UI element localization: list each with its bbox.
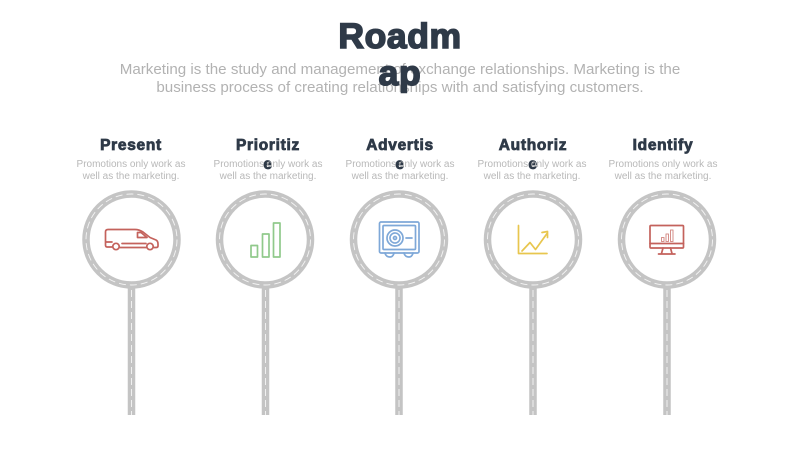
heading: prioritize: e	[263, 156, 273, 173]
text: present description: Promotions only work as	[77, 159, 185, 170]
heading: advertise: e	[395, 156, 405, 173]
heading: prioritize: Prioritiz	[236, 137, 300, 154]
panel: authorize	[478, 137, 586, 415]
heading: authorize: Authoriz	[499, 137, 567, 154]
text: advertise description: well as the marketing.	[351, 171, 448, 182]
text: advertise description: Promotions only work as	[346, 159, 454, 170]
text: identify description	[609, 159, 717, 182]
text: authorize description: Promotions only work as	[478, 159, 586, 170]
title: ap	[379, 53, 421, 93]
icon: bar signal	[251, 223, 280, 257]
subtitle: business process of creating relationships with and satisfying customers.	[156, 79, 644, 96]
text: present description	[77, 159, 185, 182]
text: prioritize description: well as the marketing.	[219, 171, 316, 182]
text: identify description: well as the marketing.	[614, 171, 711, 182]
road pin: authorize	[488, 194, 578, 415]
text: advertise description	[346, 159, 454, 182]
text: authorize description: well as the marketing.	[483, 171, 580, 182]
icon: monitor	[650, 226, 684, 254]
heading: prioritize	[236, 137, 300, 173]
icon: line chart	[518, 226, 548, 254]
panel: prioritize	[214, 137, 322, 415]
road pin: identify	[622, 194, 712, 415]
text: identify description: Promotions only work as	[609, 159, 717, 170]
subtitle: Marketing is the study and management of exchange relationships. Marketing is the	[120, 61, 680, 78]
panel: present	[77, 137, 185, 415]
heading: identify: Identify	[633, 137, 693, 154]
title	[338, 16, 462, 93]
title: Roadm	[338, 16, 462, 56]
heading: advertise	[366, 137, 434, 173]
heading: authorize	[499, 137, 567, 173]
icon: van	[106, 230, 158, 250]
road pin: advertise	[354, 194, 444, 415]
road pin: present	[86, 194, 177, 415]
icon: safe	[380, 222, 419, 257]
subtitle	[120, 61, 680, 96]
text: prioritize description	[214, 159, 322, 182]
heading: present: Present	[100, 137, 162, 154]
text: prioritize description: Promotions only work as	[214, 159, 322, 170]
text: present description: well as the marketing.	[82, 171, 179, 182]
panel: identify	[609, 137, 717, 415]
heading: advertise: Advertis	[366, 137, 434, 154]
road pin: prioritize	[220, 194, 310, 415]
panel: advertise	[346, 137, 454, 415]
text: authorize description	[478, 159, 586, 182]
heading: authorize: e	[528, 156, 538, 173]
